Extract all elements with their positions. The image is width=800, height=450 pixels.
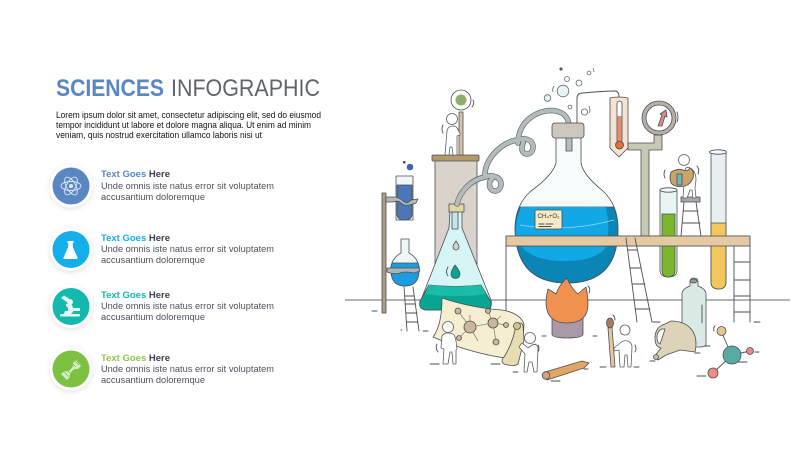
intro text block: Lorem ipsum dolor sit amet, consectetur adipiscing elit, sed do eiusmod [56, 110, 321, 120]
person on stepladder [664, 154, 701, 236]
conical flask with teal liquid [420, 204, 491, 310]
coiled gas tubes [457, 111, 569, 204]
list item: flask: accusantium doloremque [101, 255, 205, 265]
green test tube [660, 188, 677, 277]
poster molecule diagram [455, 308, 508, 345]
small round flask with ladder [372, 239, 428, 331]
yellow test tube [710, 150, 726, 289]
list item: DNA: Unde omnis iste natus error sit voluptatem [101, 364, 274, 374]
gauge on T-pipe [628, 101, 678, 236]
redraw of shelf over test tubes [506, 236, 750, 246]
ground line [345, 299, 790, 301]
list item: flask: Unde omnis iste natus error sit voluptatem [101, 244, 274, 254]
left stand with test tube [382, 161, 418, 313]
list item: microscope [49, 285, 274, 330]
list item: microscope: accusantium doloremque [101, 312, 205, 322]
round flask with blue liquid [515, 123, 618, 283]
list item: atom: accusantium doloremque [101, 192, 205, 202]
list item: DNA [49, 348, 274, 392]
list item: atom: Text Goes Here [101, 168, 170, 179]
pencil [542, 361, 589, 381]
intro text block: tempor incididunt ut labore et dolore magna aliqua. Ut enim ad minim [56, 120, 311, 130]
thermometer [610, 97, 628, 157]
person holding poster right [513, 332, 539, 372]
wooden shelf [506, 236, 750, 246]
intro text block: veniam, quis nostrud exercitation ullamco laboris nisi ut [56, 130, 263, 140]
list item: DNA: Text Goes Here [101, 352, 170, 363]
list item: DNA: accusantium doloremque [101, 375, 205, 385]
title [56, 75, 320, 102]
list item: microscope: Text Goes Here [101, 289, 170, 300]
list item: flask [49, 228, 274, 273]
tall column with person and sign [432, 90, 479, 265]
icon: flask [63, 241, 78, 259]
formula label [535, 210, 562, 229]
icon: DNA helix [60, 360, 81, 380]
icon: atom [61, 175, 81, 197]
intro text block [56, 110, 321, 140]
shelf legs [505, 246, 507, 312]
illustration: laboratory [345, 68, 790, 381]
gas pipe to thermometer [577, 91, 619, 123]
molecule poster [433, 298, 524, 366]
list item: atom [49, 164, 274, 210]
list item: atom: Unde omnis iste natus error sit voluptatem [101, 181, 274, 191]
glass bottle [682, 278, 706, 347]
tipped jug [650, 321, 710, 361]
person holding poster left [430, 322, 500, 364]
burner with flame [542, 278, 597, 338]
list item: microscope: Unde omnis iste natus error sit voluptatem [101, 301, 274, 311]
icon: microscope [60, 296, 80, 316]
matchstick and person [600, 315, 639, 367]
title: SCIENCES [56, 75, 164, 102]
bubbles [544, 68, 594, 115]
right ladder [734, 246, 760, 322]
tall ladder [626, 238, 660, 322]
list item: flask: Text Goes Here [101, 232, 170, 243]
molecule [697, 326, 759, 378]
formula label: CH₄+O₂ [538, 214, 560, 220]
title: INFOGRAPHIC [171, 75, 320, 102]
